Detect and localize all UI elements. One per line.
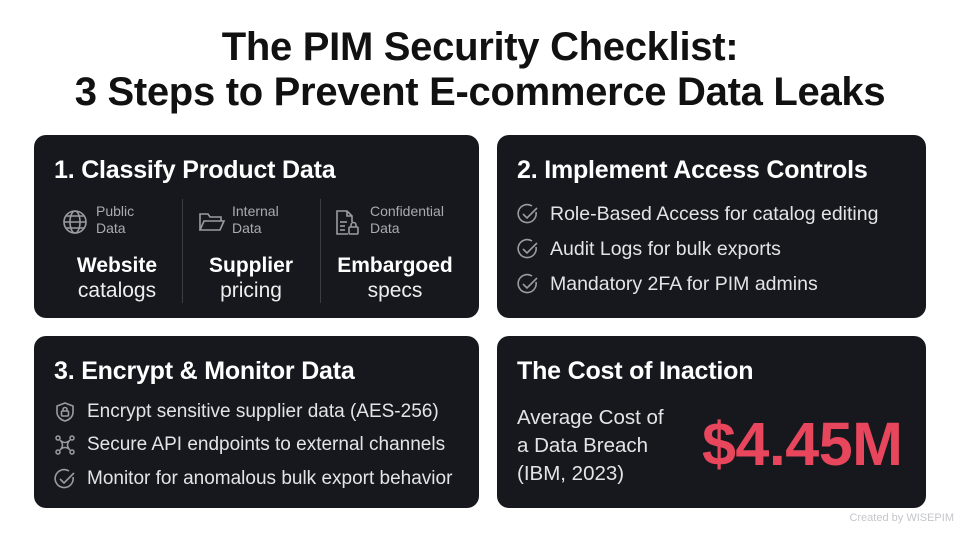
text: average cost: (IBM, 2023) bbox=[517, 462, 624, 485]
item: api bbox=[55, 434, 445, 455]
text: average cost bbox=[517, 406, 664, 485]
heading: access controls: 2. Implement Access Controls bbox=[517, 156, 868, 184]
footer credit: Created by WISEPIM bbox=[849, 512, 954, 524]
panel: encrypt: Encrypt sensitive supplier data (AES-256) bbox=[87, 401, 439, 422]
column: confidential: Data bbox=[370, 220, 400, 236]
title: The PIM Security Checklist: bbox=[222, 25, 738, 69]
text: average cost: a Data Breach bbox=[517, 434, 648, 457]
item: monitor bbox=[54, 468, 452, 489]
column: public bbox=[63, 203, 157, 302]
panel: encrypt: Monitor for anomalous bulk export behavior bbox=[87, 468, 452, 489]
column: public: catalogs bbox=[78, 279, 156, 302]
column: internal: pricing bbox=[220, 279, 282, 302]
column: confidential bbox=[336, 203, 453, 302]
item: encrypt bbox=[56, 401, 439, 422]
title bbox=[75, 25, 885, 114]
heading: encrypt: 3. Encrypt & Monitor Data bbox=[54, 357, 355, 385]
column: confidential: specs bbox=[368, 279, 422, 302]
heading: cost: The Cost of Inaction bbox=[517, 357, 753, 385]
panel: encrypt: Secure API endpoints to external channels bbox=[87, 434, 445, 455]
icon: folder bbox=[198, 213, 226, 231]
title: 3 Steps to Prevent E-commerce Data Leaks bbox=[75, 70, 885, 114]
column: internal: Data bbox=[232, 220, 262, 236]
panel: access controls: Audit Logs for bulk exports bbox=[550, 238, 781, 260]
text: average cost: Average Cost of bbox=[517, 406, 664, 429]
column: internal: Supplier bbox=[209, 254, 293, 277]
item: audit logs bbox=[517, 238, 781, 260]
item: 2FA bbox=[517, 273, 818, 295]
column: internal: Internal bbox=[232, 203, 279, 219]
panel: access controls: Role-Based Access for catalog editing bbox=[550, 203, 878, 225]
icon: globe bbox=[63, 210, 87, 234]
column: confidential: Embargoed bbox=[337, 254, 453, 277]
panel: classify bbox=[34, 135, 479, 318]
heading: classify: 1. Classify Product Data bbox=[54, 156, 335, 184]
stat: 4.45M: $4.45M bbox=[702, 410, 902, 478]
panel: cost of inaction bbox=[497, 336, 926, 508]
item: role based bbox=[517, 203, 878, 225]
panel: access controls: Mandatory 2FA for PIM admins bbox=[550, 273, 818, 295]
column: public: Website bbox=[77, 254, 157, 277]
column: public: Public bbox=[96, 203, 134, 219]
column: confidential: Confidential bbox=[370, 203, 444, 219]
column: public: Data bbox=[96, 220, 126, 236]
panel: access controls bbox=[497, 135, 926, 318]
panel: encrypt bbox=[34, 336, 479, 508]
icon: document lock bbox=[336, 210, 359, 235]
column: internal bbox=[198, 203, 293, 302]
